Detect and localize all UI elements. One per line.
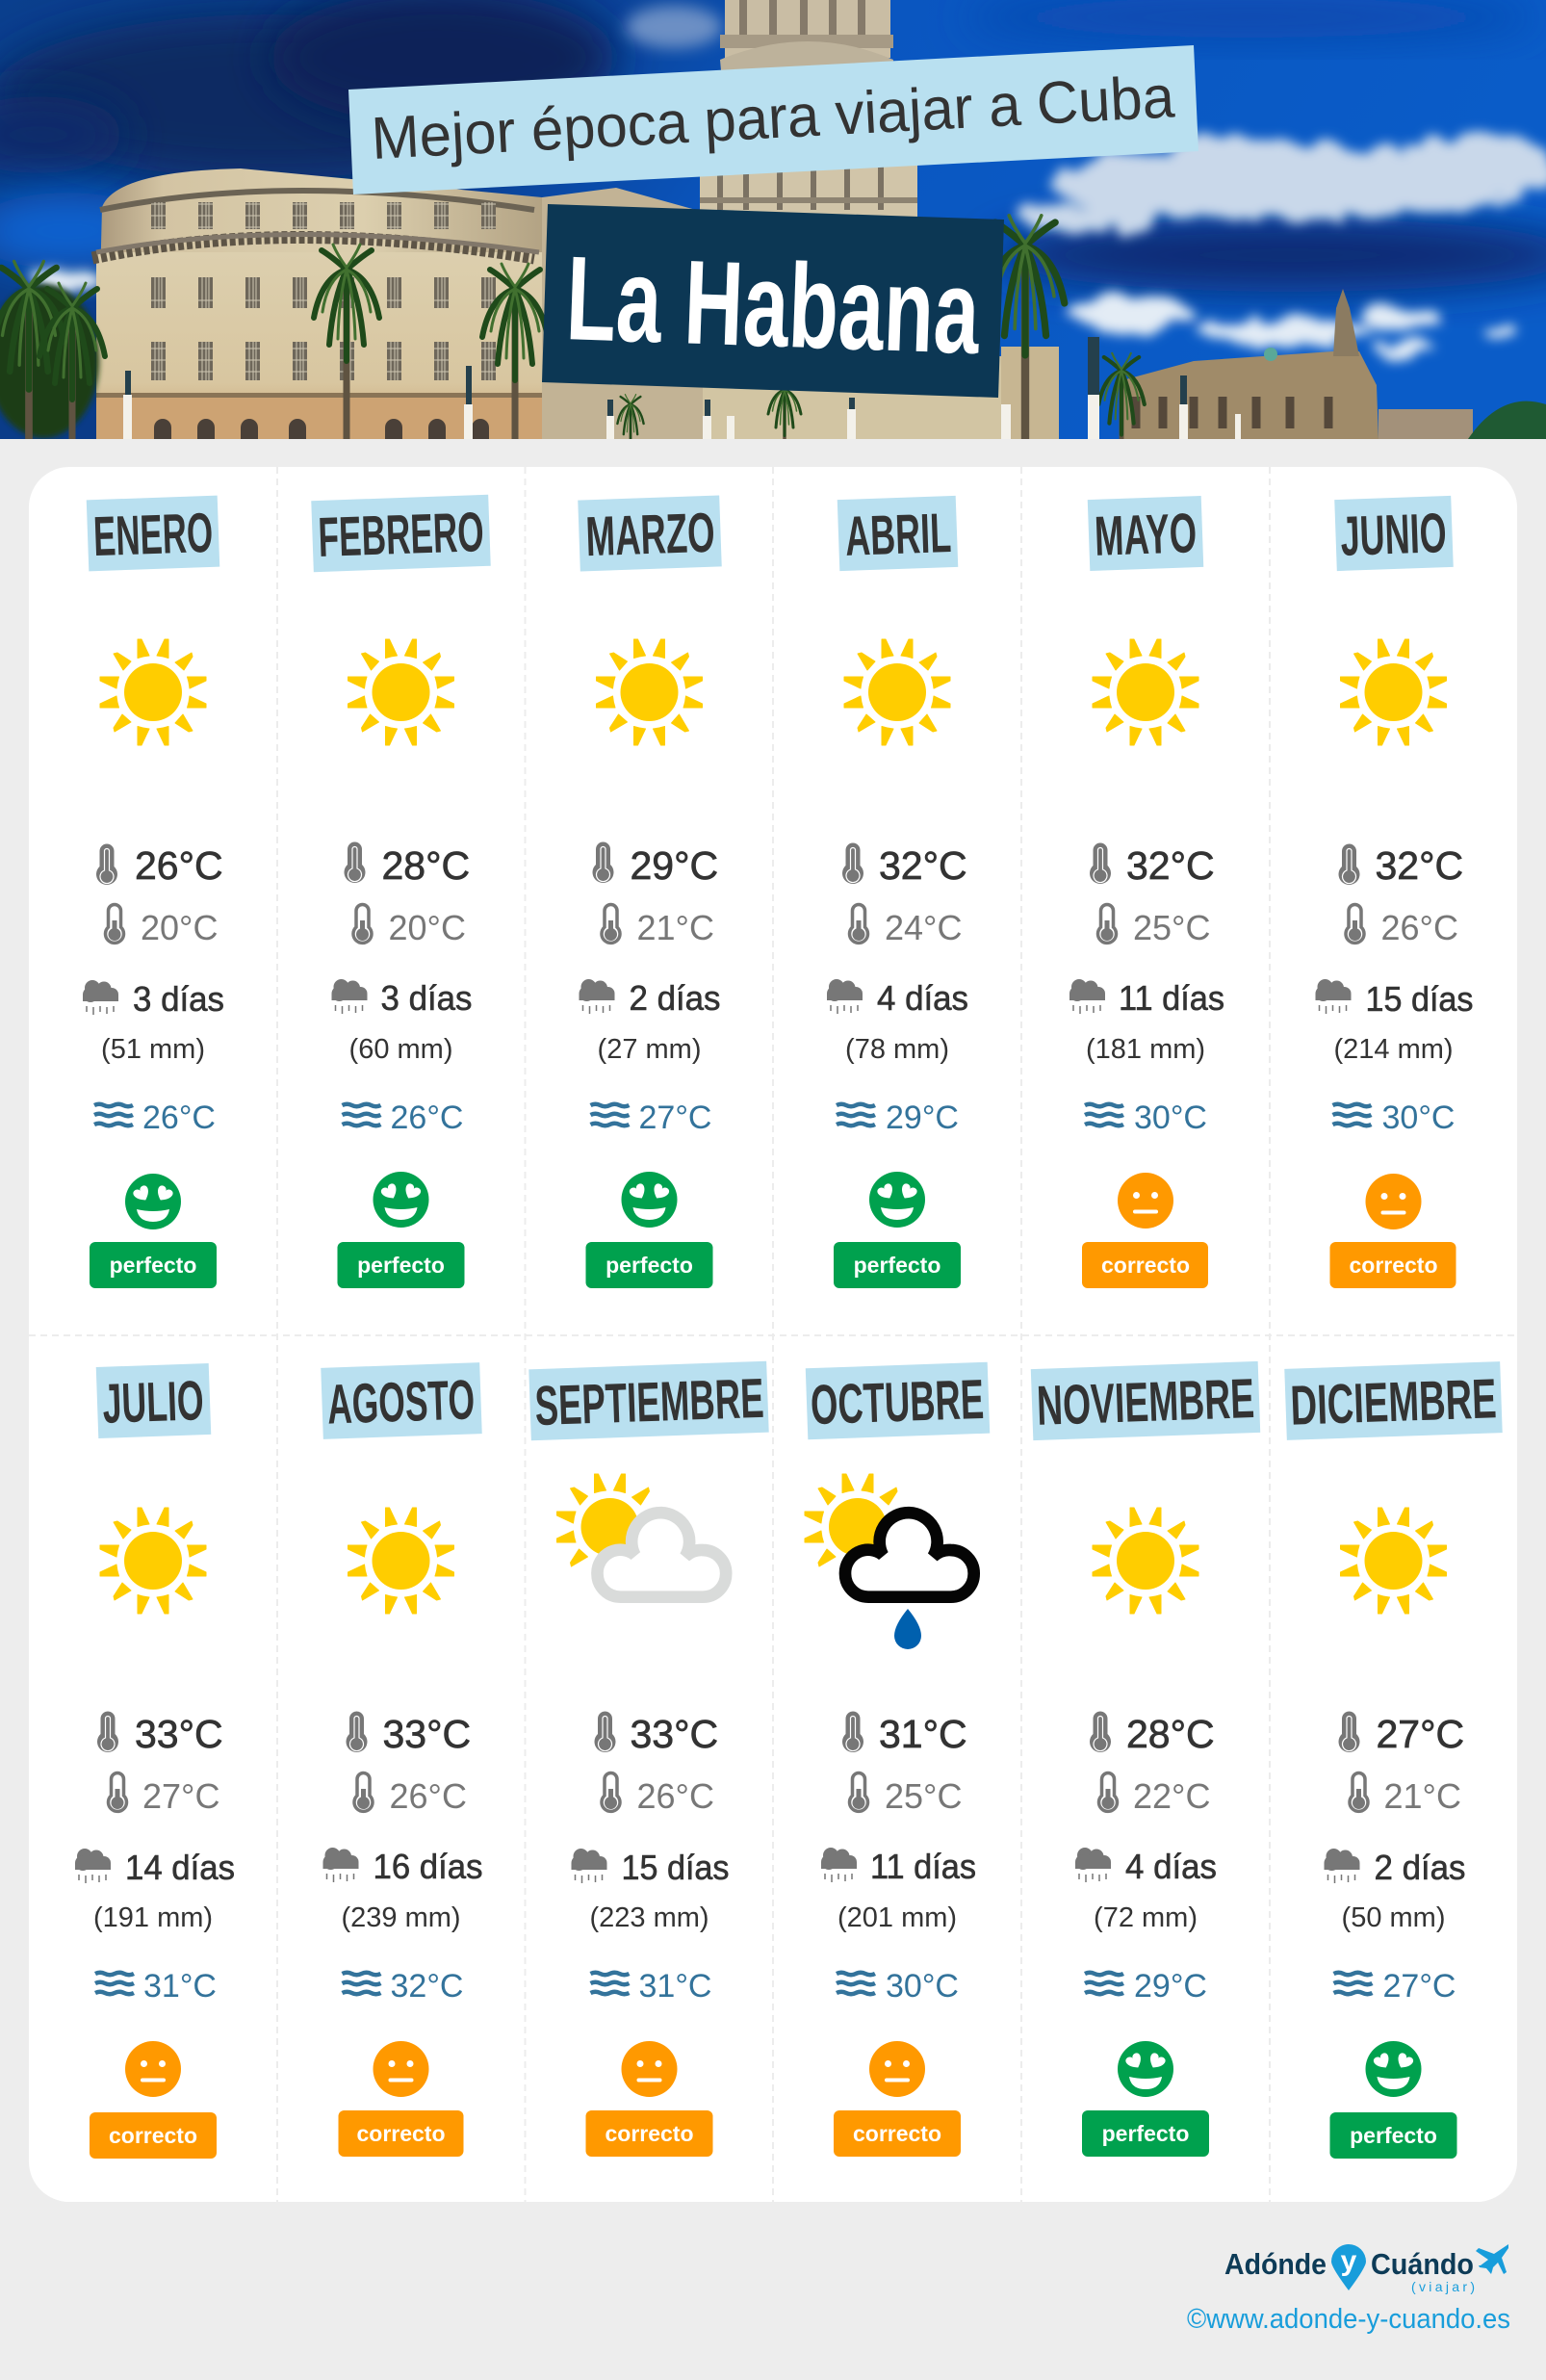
month: septiembre: correcto [605,2121,694,2146]
month: noviembre: 29°C [1134,1968,1207,2005]
month: marzo: 2 días [630,978,720,1018]
title banner: Mejor época para viajar a Cuba [370,64,1176,172]
month: diciembre: 27°C [1382,1968,1456,2005]
month: mayo [1069,496,1224,1288]
month: marzo: 21°C [637,908,714,947]
month: abril: 4 días [877,978,968,1018]
month: julio: 27°C [142,1776,219,1816]
month: octubre [805,1362,990,2157]
month: noviembre: 28°C [1126,1712,1215,1756]
month: diciembre [1284,1361,1503,2159]
month: noviembre: NOVIEMBRE [1036,1367,1255,1437]
month: noviembre [1031,1361,1260,2157]
month: agosto: 32°C [391,1968,463,2005]
month: junio: (214 mm) [1333,1034,1454,1065]
theatre right [1122,289,1546,439]
month: febrero: (60 mm) [349,1034,452,1065]
month: marzo: (27 mm) [598,1034,701,1065]
month: junio: JUNIO [1339,502,1448,568]
month: enero [83,496,224,1288]
month: julio: correcto [109,2123,197,2148]
month: febrero: perfecto [357,1253,445,1278]
month: noviembre: 4 días [1125,1847,1217,1886]
month: octubre: OCTUBRE [810,1368,985,1436]
month: abril: (78 mm) [845,1034,949,1065]
month: enero: 26°C [135,843,223,888]
rotunda [92,168,1059,439]
logo: Adónde y Cuándo: Adónde [1224,2247,1327,2281]
icon: sun behind black cloud with drop [805,1474,974,1649]
month: marzo [578,495,722,1288]
month: septiembre: 26°C [637,1776,714,1816]
month: noviembre: (72 mm) [1094,1902,1198,1933]
month: abril: ABRIL [844,502,952,568]
city banner [542,204,1004,398]
month: septiembre: 33°C [630,1712,718,1756]
month: agosto: (239 mm) [341,1902,461,1933]
month: junio [1315,496,1473,1288]
month: junio: 26°C [1380,908,1458,947]
month: julio: 31°C [143,1968,217,2005]
month: marzo: 27°C [639,1099,711,1136]
logo: Adónde y Cuándo: Cuándo [1371,2247,1474,2281]
month: julio: 33°C [135,1712,223,1756]
month: junio: 15 días [1365,979,1473,1019]
month: julio: JULIO [101,1369,205,1436]
month: abril: 24°C [885,908,962,947]
month: julio [75,1363,235,2159]
month: marzo: 29°C [630,843,718,888]
month: diciembre: 21°C [1384,1776,1461,1816]
month: diciembre: 27°C [1377,1712,1464,1756]
month: septiembre: 15 días [622,1848,730,1887]
month: septiembre: 31°C [639,1968,711,2005]
icon: sun behind grey cloud [556,1474,726,1597]
month: abril: 32°C [879,843,967,888]
month: septiembre [528,1361,769,2157]
month: mayo: 11 días [1119,978,1224,1018]
month: junio: correcto [1349,1253,1438,1278]
panel: monthly climate table [29,467,1517,2202]
month: abril: 29°C [886,1099,959,1136]
month: octubre: 30°C [886,1968,959,2005]
month: octubre: 25°C [885,1776,962,1816]
month: octubre: correcto [853,2121,941,2146]
month: agosto: 16 días [374,1847,483,1886]
month: noviembre: 22°C [1133,1776,1210,1816]
month: julio: (191 mm) [93,1902,213,1933]
palms and lamp posts [0,206,1241,439]
month: agosto [321,1362,483,2157]
month: enero: 26°C [142,1099,216,1136]
month: agosto: 33°C [383,1712,471,1756]
month: julio: 14 días [125,1848,235,1887]
month: mayo: (181 mm) [1086,1034,1205,1065]
month: abril [827,496,968,1288]
month: febrero: 28°C [381,843,470,888]
month: diciembre: 2 días [1375,1848,1465,1887]
month: mayo: 30°C [1134,1099,1207,1136]
month: octubre: 11 días [870,1847,976,1886]
logo: Adónde y Cuándo: y [1341,2245,1357,2277]
month: agosto: 26°C [389,1776,467,1816]
month: febrero [311,495,491,1288]
month: mayo: MAYO [1094,502,1198,568]
month: diciembre: (50 mm) [1342,1902,1445,1933]
month: marzo: MARZO [584,502,716,568]
month: septiembre: (223 mm) [589,1902,709,1933]
website credit: ©www.adonde-y-cuando.es [1187,2304,1510,2335]
month: septiembre: SEPTIEMBRE [533,1367,765,1437]
month: junio: 30°C [1382,1099,1455,1136]
month: agosto: AGOSTO [326,1368,476,1436]
month: noviembre: perfecto [1102,2121,1189,2146]
month: enero: 3 días [133,979,224,1019]
month: febrero: 26°C [391,1099,463,1136]
month: enero: perfecto [110,1253,196,1278]
month: enero: 20°C [141,908,218,947]
month: mayo: 25°C [1133,908,1210,947]
month: agosto: correcto [356,2121,446,2146]
month: octubre: (201 mm) [837,1902,957,1933]
month: enero: ENERO [92,502,214,568]
month: febrero: 20°C [389,908,466,947]
header photo: Capitolio de La Habana [0,0,1546,439]
month: diciembre: perfecto [1350,2123,1437,2148]
month: febrero: FEBRERO [317,501,485,569]
month: marzo: perfecto [606,1253,693,1278]
logo: Adónde y Cuándo [1224,2244,1508,2294]
month: mayo: correcto [1101,1253,1190,1278]
city banner: La Habana [564,232,982,379]
month: junio: 32°C [1375,843,1463,888]
month: abril: perfecto [854,1253,940,1278]
month: febrero: 3 días [381,978,472,1018]
month: octubre: 31°C [879,1712,967,1756]
month: mayo: 32°C [1126,843,1215,888]
month: enero: (51 mm) [101,1034,205,1065]
dome tower [700,0,917,221]
logo: Adónde y Cuándo: (viajar) [1411,2279,1475,2294]
